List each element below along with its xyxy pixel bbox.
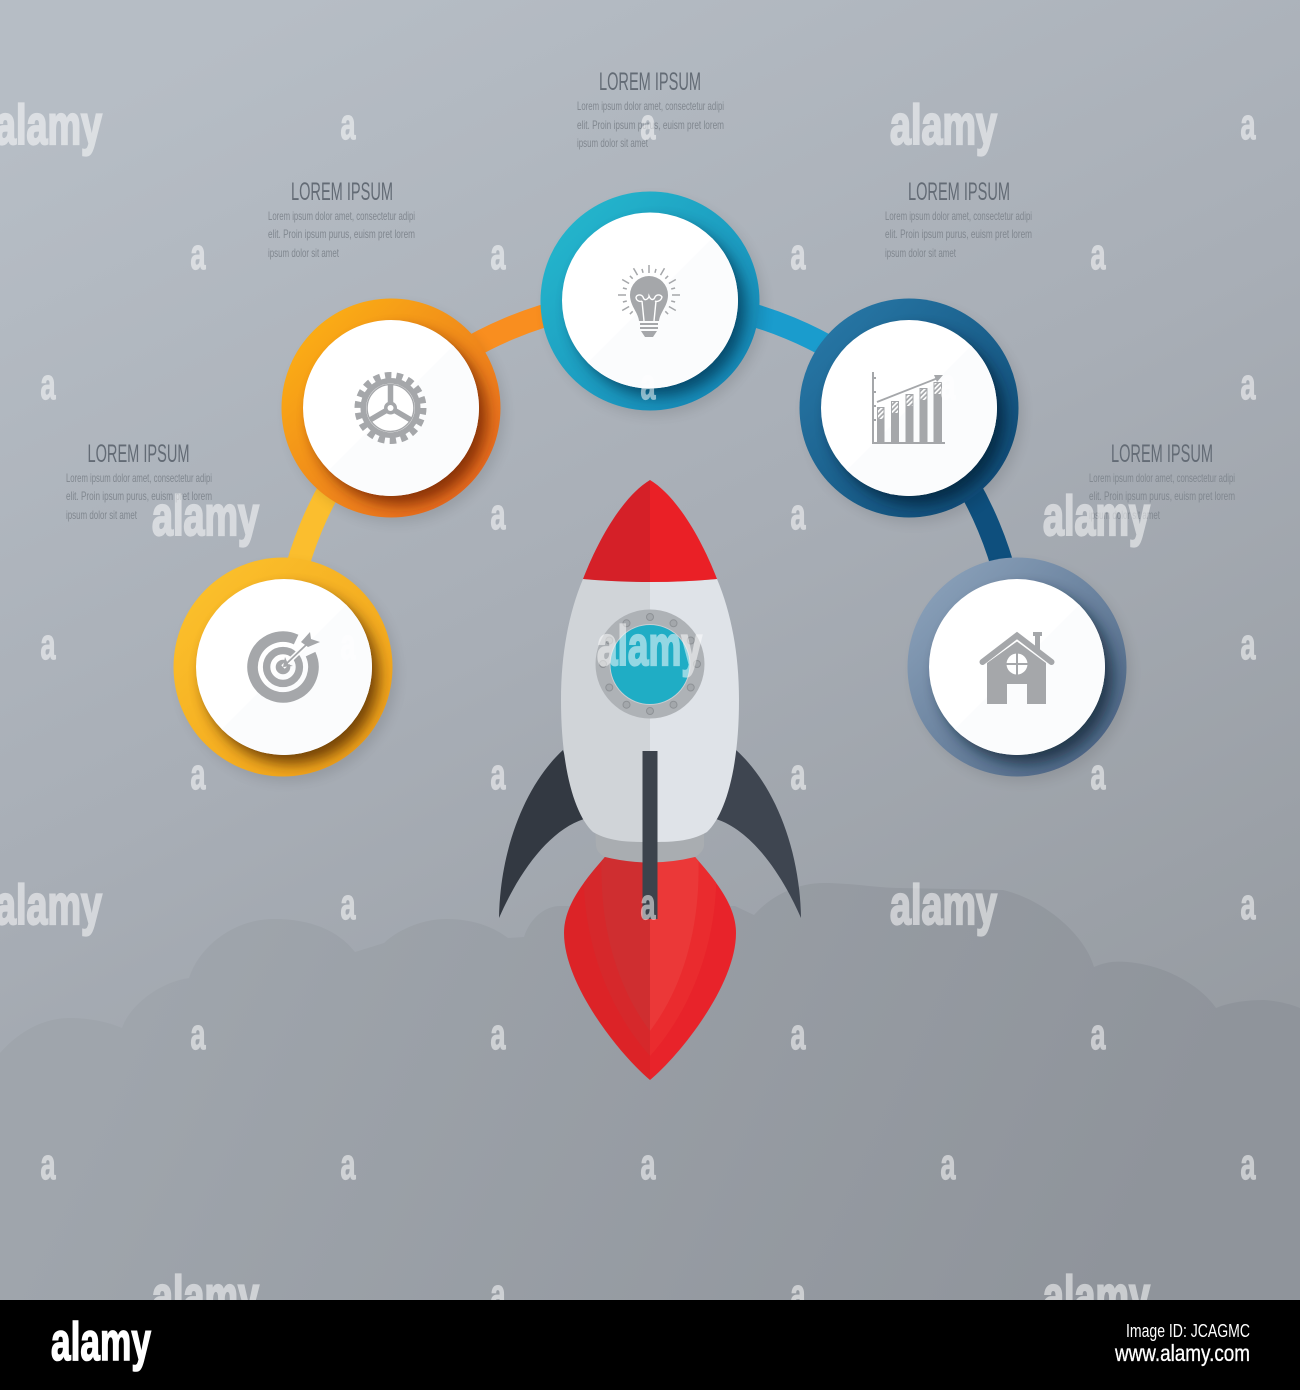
text block 3 [577,68,724,150]
watermarks: alamy [152,484,259,547]
connector arc: orange [391,300,650,408]
footer url: www.alamy.com [1114,1340,1250,1366]
watermarks: a [790,490,806,539]
watermarks: a [790,1010,806,1059]
text block 1: Lorem ipsum dolor amet, consectetur adipi [66,471,212,485]
watermarks: a [340,100,356,149]
watermarks: a [40,1140,56,1189]
watermarks: a [190,750,206,799]
watermarks: a [790,750,806,799]
text block 4: LOREM IPSUM [908,178,1010,206]
text block 1: elit. Proin ipsum purus, euism pret lorem [66,489,212,503]
watermarks: a [790,1270,806,1319]
node 3: light bulb [540,192,764,416]
text block 4: Lorem ipsum dolor amet, consectetur adipi [885,209,1032,223]
text block 2: LOREM IPSUM [291,178,393,206]
text block 2: ipsum dolor sit amet [268,246,339,260]
icon: bar chart [873,372,945,444]
watermarks: a [640,100,656,149]
footer image id: Image ID: JCAGMC [1126,1321,1250,1341]
text block 2: Lorem ipsum dolor amet, consectetur adipi [268,209,415,223]
watermarks: a [190,1010,206,1059]
watermarks: a [490,230,506,279]
rocket center stripe [642,751,658,919]
watermarks: a [1090,230,1106,279]
node 2: gear [282,298,505,523]
node 5: house [908,558,1131,782]
watermarks: a [1240,1140,1256,1189]
watermarks: a [490,490,506,539]
text block 5 [1089,440,1235,522]
watermarks: a [190,230,206,279]
watermarks: a [1090,1010,1106,1059]
text block 5: LOREM IPSUM [1111,440,1213,468]
rocket fin right [716,750,801,918]
watermarks: alamy [152,1264,259,1327]
connector arc: yellow [283,408,391,667]
text block 4: ipsum dolor sit amet [885,246,956,260]
watermarks: a [940,1140,956,1189]
watermarks: a [1090,750,1106,799]
text block 1 [66,440,212,522]
text block 5: elit. Proin ipsum purus, euism pret lorem [1089,489,1235,503]
watermarks: a [40,620,56,669]
watermarks: a [40,360,56,409]
rocket nose [583,480,717,582]
footer bar [0,1300,1300,1390]
watermarks: alamy [597,614,702,677]
watermarks: alamy [890,93,997,156]
icon: light bulb [618,265,680,337]
text block 3: ipsum dolor sit amet [577,136,648,150]
text block 3: LOREM IPSUM [599,68,701,96]
icon: target [243,627,323,707]
footer logo: alamy [51,1312,151,1372]
watermarks: a [640,360,656,409]
watermarks: a [490,750,506,799]
rocket collar [595,825,704,862]
watermarks: a [1240,620,1256,669]
connector arc: light blue [650,300,909,408]
watermarks: alamy [1043,484,1150,547]
rocket body [561,579,739,842]
rocket window [596,610,704,718]
watermarks: a [340,1140,356,1189]
text block 1: LOREM IPSUM [88,440,190,468]
watermarks: a [640,1140,656,1189]
watermarks: alamy [1043,1264,1150,1327]
watermarks: a [340,620,356,669]
watermarks: a [1240,880,1256,929]
text block 4 [885,178,1032,260]
text block 4: elit. Proin ipsum purus, euism pret lorem [885,227,1032,241]
rocket fin left [499,750,584,918]
text block 1: ipsum dolor sit amet [66,508,137,522]
text block 2 [268,178,415,260]
node 1: target [174,558,397,782]
node 4: chart [800,298,1023,523]
text block 3: elit. Proin ipsum purus, euism pret lorem [577,118,724,132]
text block 2: elit. Proin ipsum purus, euism pret lorem [268,227,415,241]
watermarks: a [490,1010,506,1059]
watermarks: a [1240,360,1256,409]
watermarks: a [940,620,956,669]
icon: gear [358,376,423,440]
watermarks: a [940,360,956,409]
watermarks: a [340,360,356,409]
clouds [0,883,1300,1300]
watermarks: a [340,880,356,929]
flame [564,850,736,1080]
watermarks: a [1240,100,1256,149]
watermarks: a [640,880,656,929]
watermarks: alamy [890,873,997,936]
text block 3: Lorem ipsum dolor amet, consectetur adipi [577,99,724,113]
text block 5: ipsum dolor sit amet [1089,508,1160,522]
rocket [499,480,801,1080]
icon: house [982,632,1052,704]
watermarks: a [490,1270,506,1319]
connector arc: dark blue [909,408,1017,667]
watermarks: a [790,230,806,279]
